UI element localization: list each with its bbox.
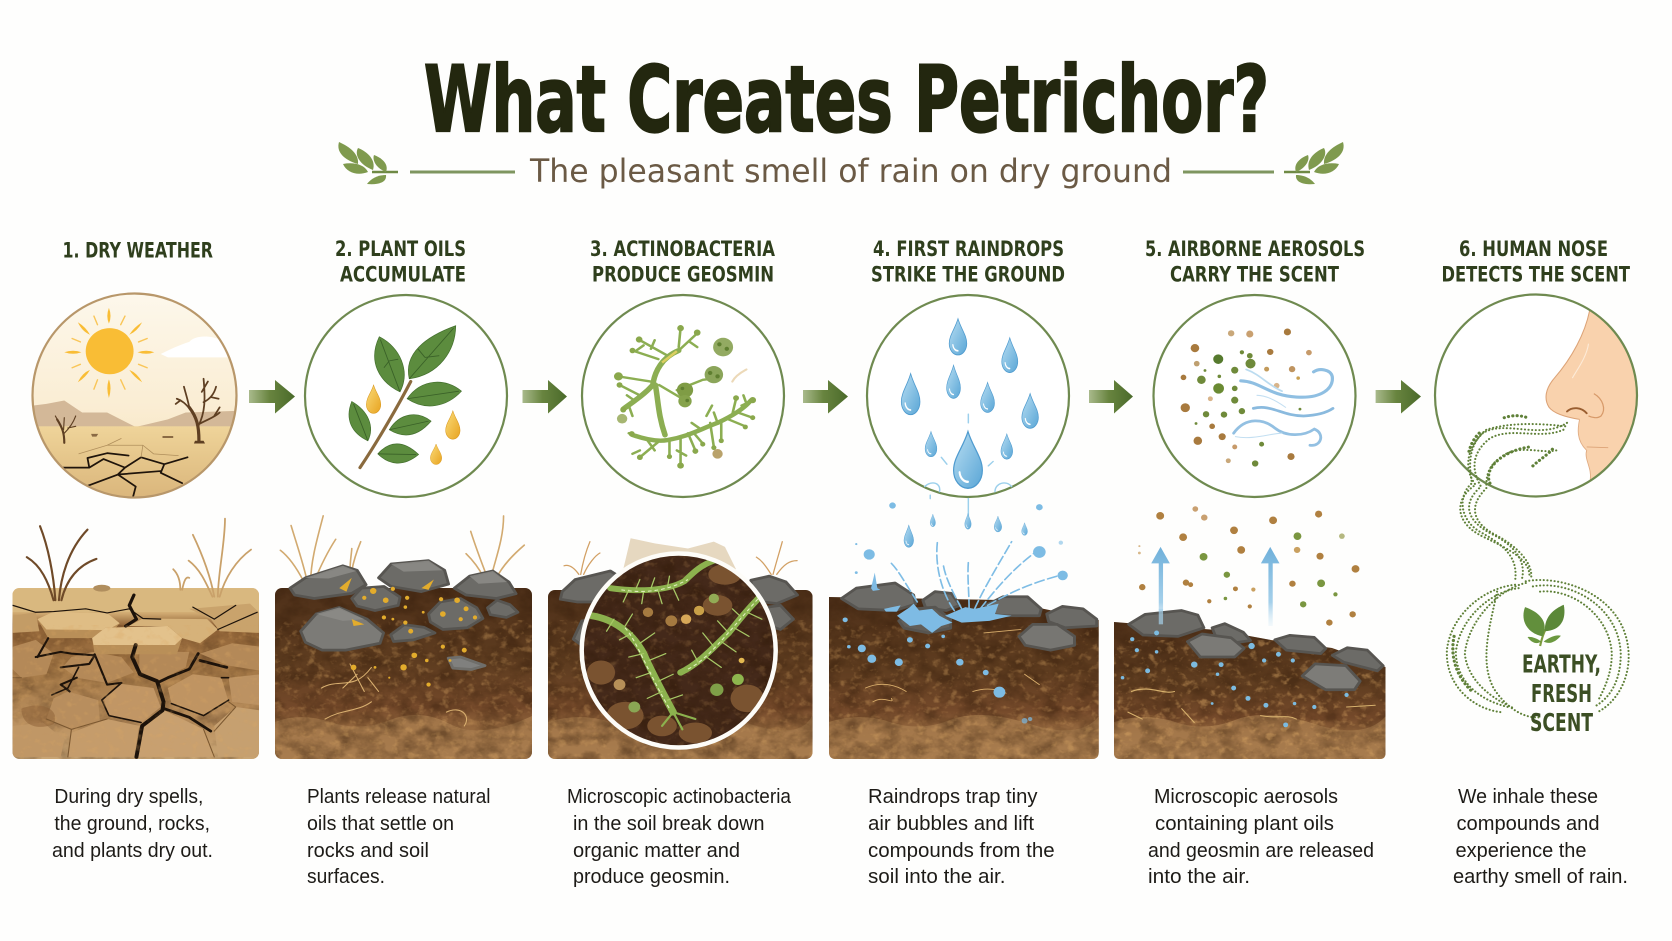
icon: leaf sprig	[1523, 605, 1564, 646]
description: rocks and soil	[307, 840, 429, 862]
heading: ACCUMULATE	[340, 263, 466, 287]
icon: dead trees	[55, 379, 220, 443]
description: We inhale these	[1458, 786, 1598, 808]
description: the ground, rocks,	[54, 813, 210, 835]
description: Plants release natural	[307, 786, 490, 808]
description: Microscopic actinobacteria	[567, 786, 792, 808]
rocks	[290, 561, 518, 669]
arrow	[1089, 380, 1133, 414]
description: and geosmin are released	[1148, 840, 1374, 862]
subtitle text: The pleasant smell of rain on dry ground	[529, 152, 1172, 190]
description: compounds and	[1456, 813, 1600, 835]
description: produce geosmin.	[573, 866, 730, 888]
heading	[590, 237, 776, 287]
icon: left sprig	[338, 142, 398, 184]
magnifier circle	[578, 550, 780, 752]
description: surfaces.	[307, 866, 385, 888]
scent label: FRESH	[1531, 679, 1592, 708]
soil panel: rocks with oil	[275, 516, 532, 760]
description: experience the	[1456, 840, 1586, 862]
description: Microscopic aerosols	[1154, 786, 1338, 808]
panel: step 5 airborne aerosols	[1114, 237, 1421, 888]
arrow	[522, 380, 567, 414]
soil panel: splash	[829, 502, 1099, 760]
title: What Creates Petrichor?	[424, 48, 1269, 153]
panel: step 2 plant oils	[275, 237, 567, 888]
description: in the soil break down	[573, 813, 764, 835]
dried soil plates	[11, 640, 261, 757]
heading: 3. ACTINOBACTERIA	[590, 237, 776, 261]
icon: sun over cracked desert	[29, 290, 243, 505]
heading	[1442, 237, 1631, 287]
icon: nose	[1435, 294, 1648, 496]
arrow	[1376, 380, 1421, 414]
heading: 4. FIRST RAINDROPS	[873, 237, 1064, 261]
description	[52, 786, 213, 862]
soil panel: rising particles	[1114, 506, 1386, 760]
rising arrows	[1151, 547, 1280, 626]
heading: STRIKE THE GROUND	[871, 263, 1065, 287]
description: oils that settle on	[307, 813, 454, 835]
description: compounds from the	[868, 840, 1055, 862]
description: air bubbles and lift	[868, 813, 1034, 835]
soil panel: magnified bacteria	[548, 538, 813, 760]
arrow	[249, 380, 295, 414]
subtitle with laurel ornaments	[338, 142, 1344, 190]
heading: 1. DRY WEATHER	[62, 238, 213, 262]
description	[307, 786, 490, 888]
heading	[1145, 237, 1365, 287]
description	[868, 786, 1055, 888]
description	[1148, 786, 1374, 888]
panel: step 4 first raindrops	[829, 237, 1133, 888]
description: organic matter and	[573, 840, 740, 862]
rocks	[560, 571, 797, 645]
description	[567, 786, 792, 888]
rocks	[841, 583, 1097, 650]
panel: step 3 actinobacteria	[548, 237, 848, 888]
description: earthy smell of rain.	[1453, 866, 1628, 888]
heading: CARRY THE SCENT	[1170, 263, 1340, 287]
scent label: EARTHY,	[1522, 650, 1601, 679]
scent label	[1522, 650, 1601, 737]
panel: step 1 dry weather	[11, 238, 295, 862]
scent label: SCENT	[1530, 708, 1593, 737]
description: into the air.	[1148, 866, 1250, 888]
oil specks	[339, 578, 477, 687]
icon: dry grass	[280, 516, 524, 581]
description: During dry spells,	[54, 786, 203, 808]
description: soil into the air.	[868, 866, 1006, 888]
arrow	[803, 380, 848, 414]
heading: 5. AIRBORNE AEROSOLS	[1145, 237, 1365, 261]
description: containing plant oils	[1155, 813, 1334, 835]
panel: step 6 human nose	[1435, 237, 1648, 888]
description: and plants dry out.	[52, 840, 213, 862]
water splash	[871, 573, 1012, 633]
icon: dry grass	[27, 526, 96, 600]
description	[1453, 786, 1628, 888]
rocks	[1129, 611, 1383, 690]
heading	[871, 237, 1065, 287]
icon: leaves and oil drops	[305, 295, 507, 497]
heading: 2. PLANT OILS	[335, 237, 466, 261]
icon: falling raindrops	[867, 295, 1069, 516]
heading	[335, 237, 466, 287]
particles	[1138, 506, 1359, 626]
icon: aerosol particles and wind	[1154, 295, 1356, 497]
icon: right sprig	[1284, 142, 1344, 184]
description: Raindrops trap tiny	[868, 786, 1038, 808]
icon: branching bacteria	[582, 295, 784, 497]
soil panel: cracked earth	[11, 519, 261, 759]
scent trail and badge	[1447, 416, 1629, 737]
heading: PRODUCE GEOSMIN	[592, 263, 774, 287]
cracks	[57, 453, 187, 500]
heading: 6. HUMAN NOSE	[1459, 237, 1608, 261]
